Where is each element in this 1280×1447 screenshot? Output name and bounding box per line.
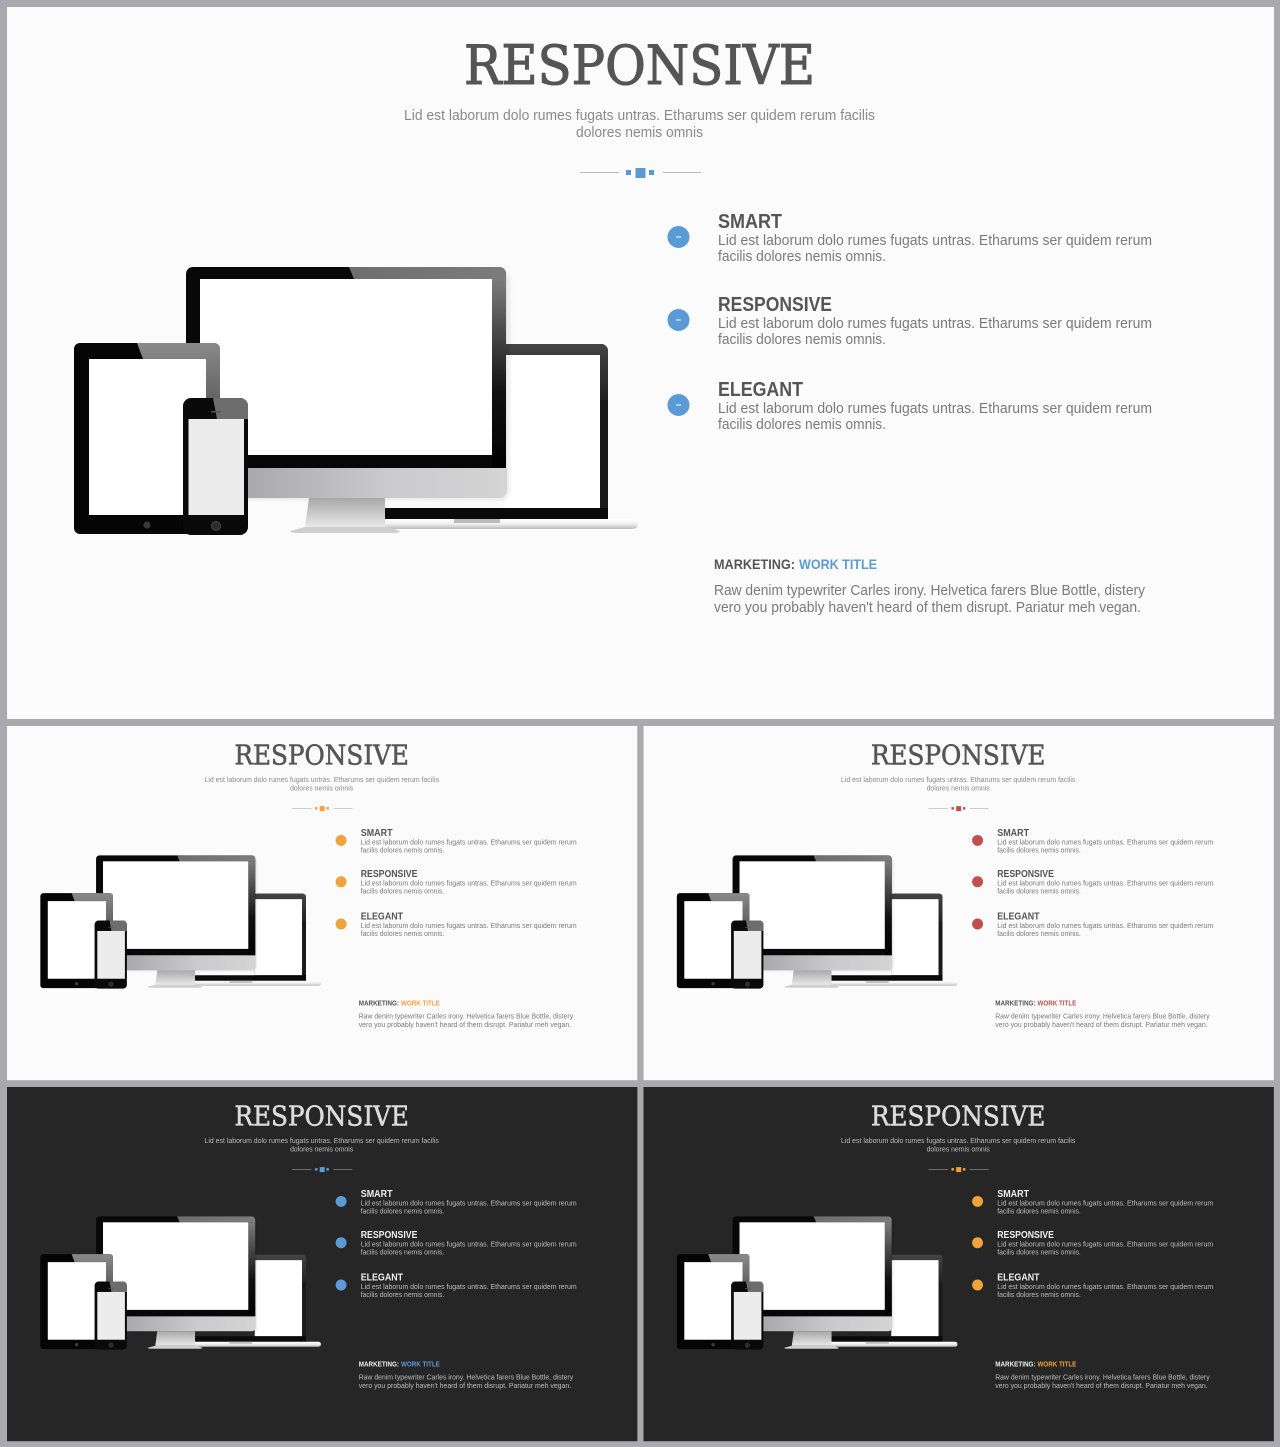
title: RESPONSIVE <box>871 1101 1045 1132</box>
subtitle: Lid est laborum dolo rumes fugats untras. Etharums ser quidem rerum facilis <box>404 108 875 124</box>
title: RESPONSIVE <box>464 34 815 97</box>
feature: elegant: ELEGANT <box>997 912 1040 923</box>
feature: elegant <box>668 379 1152 433</box>
feature: responsive: facilis dolores nemis omnis. <box>718 332 886 348</box>
feature: responsive: facilis dolores nemis omnis. <box>997 1248 1081 1257</box>
marketing block: Raw denim typewriter Carles irony. Helvetica farers Blue Bottle, distery <box>995 1012 1210 1021</box>
subtitle: Lid est laborum dolo rumes fugats untras. Etharums ser quidem rerum facilis <box>205 775 439 784</box>
feature: elegant <box>336 1273 577 1299</box>
subtitle: Lid est laborum dolo rumes fugats untras. Etharums ser quidem rerum facilis <box>841 775 1076 784</box>
feature: responsive <box>972 1230 1213 1257</box>
divider ornament <box>292 806 352 811</box>
marketing block <box>714 556 1146 616</box>
marketing block: WORK TITLE <box>401 1001 440 1008</box>
feature: smart: Lid est laborum dolo rumes fugats untras. Etharums ser quidem rerum <box>997 837 1213 846</box>
feature: responsive: Lid est laborum dolo rumes fugats untras. Etharums ser quidem rerum <box>997 1240 1213 1249</box>
feature: elegant <box>972 912 1213 938</box>
feature: responsive <box>336 869 577 896</box>
feature: elegant: Lid est laborum dolo rumes fugats untras. Etharums ser quidem rerum <box>718 401 1152 417</box>
feature: smart: Lid est laborum dolo rumes fugats untras. Etharums ser quidem rerum <box>361 1198 577 1207</box>
feature: elegant: ELEGANT <box>361 1273 403 1284</box>
feature: smart: SMART <box>361 828 393 839</box>
marketing block: WORK TITLE <box>401 1362 440 1369</box>
subtitle: dolores nemis omnis <box>927 1145 990 1154</box>
feature: responsive: RESPONSIVE <box>997 869 1054 880</box>
feature: smart: facilis dolores nemis omnis. <box>997 1206 1081 1215</box>
marketing block: vero you probably haven't heard of them disrupt. Pariatur meh vegan. <box>995 1381 1208 1390</box>
marketing block: WORK TITLE <box>1038 1362 1077 1369</box>
feature: smart: facilis dolores nemis omnis. <box>997 845 1081 854</box>
feature: responsive: Lid est laborum dolo rumes fugats untras. Etharums ser quidem rerum <box>361 879 577 888</box>
feature: elegant: ELEGANT <box>997 1273 1040 1284</box>
feature: elegant: facilis dolores nemis omnis. <box>361 1290 444 1299</box>
subtitle: dolores nemis omnis <box>290 1145 354 1154</box>
feature: elegant: ELEGANT <box>361 912 403 923</box>
feature: smart <box>668 211 1152 265</box>
marketing block: vero you probably haven't heard of them disrupt. Pariatur meh vegan. <box>714 600 1141 616</box>
marketing block <box>359 1001 574 1029</box>
subtitle: Lid est laborum dolo rumes fugats untras. Etharums ser quidem rerum facilis <box>841 1136 1076 1145</box>
feature: smart: Lid est laborum dolo rumes fugats untras. Etharums ser quidem rerum <box>361 837 577 846</box>
feature: elegant: Lid est laborum dolo rumes fugats untras. Etharums ser quidem rerum <box>361 1282 577 1291</box>
feature: smart: Lid est laborum dolo rumes fugats untras. Etharums ser quidem rerum <box>997 1198 1213 1207</box>
feature: smart <box>972 1189 1213 1215</box>
feature: responsive: Lid est laborum dolo rumes fugats untras. Etharums ser quidem rerum <box>718 316 1152 332</box>
feature: smart: facilis dolores nemis omnis. <box>361 845 444 854</box>
feature: responsive: RESPONSIVE <box>361 1230 418 1241</box>
marketing block <box>359 1362 574 1390</box>
divider ornament <box>292 1167 352 1172</box>
marketing block <box>995 1362 1210 1390</box>
feature: responsive <box>336 1230 577 1257</box>
feature: responsive: facilis dolores nemis omnis. <box>997 887 1081 896</box>
panel: small dark slide, orange <box>644 1087 1274 1441</box>
title: RESPONSIVE <box>871 740 1045 771</box>
marketing block: MARKETING: <box>714 556 795 572</box>
device mockups <box>40 855 321 989</box>
marketing block: MARKETING: <box>995 1001 1036 1008</box>
feature: responsive: RESPONSIVE <box>718 294 832 316</box>
marketing block: vero you probably haven't heard of them disrupt. Pariatur meh vegan. <box>359 1381 571 1390</box>
marketing block: vero you probably haven't heard of them disrupt. Pariatur meh vegan. <box>359 1020 571 1029</box>
feature: smart: SMART <box>361 1189 393 1200</box>
feature: elegant: facilis dolores nemis omnis. <box>718 417 886 433</box>
divider ornament <box>929 806 989 811</box>
feature: elegant: facilis dolores nemis omnis. <box>997 929 1081 938</box>
device mockups <box>74 267 638 535</box>
feature: responsive: Lid est laborum dolo rumes fugats untras. Etharums ser quidem rerum <box>997 879 1213 888</box>
subtitle <box>841 1136 1076 1154</box>
subtitle <box>841 775 1076 793</box>
panel: small light slide, red <box>644 726 1274 1080</box>
title: RESPONSIVE <box>234 740 409 771</box>
feature: elegant: ELEGANT <box>718 379 803 401</box>
feature: responsive: RESPONSIVE <box>361 869 418 880</box>
marketing block: MARKETING: <box>995 1362 1036 1369</box>
subtitle: dolores nemis omnis <box>290 784 354 793</box>
feature: smart: SMART <box>997 1189 1029 1200</box>
feature: elegant: facilis dolores nemis omnis. <box>997 1290 1081 1299</box>
feature: elegant: Lid est laborum dolo rumes fugats untras. Etharums ser quidem rerum <box>997 921 1213 930</box>
feature: smart <box>336 828 577 854</box>
subtitle <box>205 1136 439 1154</box>
feature: elegant <box>336 912 577 938</box>
marketing block: WORK TITLE <box>1038 1001 1077 1008</box>
marketing block: Raw denim typewriter Carles irony. Helvetica farers Blue Bottle, distery <box>359 1373 574 1382</box>
device mockups <box>677 855 957 989</box>
device mockups <box>40 1216 321 1350</box>
marketing block <box>995 1001 1210 1029</box>
marketing block: Raw denim typewriter Carles irony. Helvetica farers Blue Bottle, distery <box>995 1373 1210 1382</box>
title: RESPONSIVE <box>234 1101 409 1132</box>
subtitle <box>404 108 875 141</box>
feature: smart: facilis dolores nemis omnis. <box>718 249 886 265</box>
marketing block: WORK TITLE <box>799 556 877 572</box>
subtitle <box>205 775 439 793</box>
feature: smart: Lid est laborum dolo rumes fugats untras. Etharums ser quidem rerum <box>718 233 1152 249</box>
marketing block: vero you probably haven't heard of them disrupt. Pariatur meh vegan. <box>995 1020 1208 1029</box>
feature: responsive: Lid est laborum dolo rumes fugats untras. Etharums ser quidem rerum <box>361 1240 577 1249</box>
feature: elegant: facilis dolores nemis omnis. <box>361 929 444 938</box>
panel: small dark slide, blue <box>7 1087 637 1441</box>
feature: responsive <box>668 294 1152 348</box>
feature: responsive: facilis dolores nemis omnis. <box>361 887 444 896</box>
feature: smart: SMART <box>718 211 782 233</box>
feature: elegant: Lid est laborum dolo rumes fugats untras. Etharums ser quidem rerum <box>997 1282 1213 1291</box>
feature: smart: facilis dolores nemis omnis. <box>361 1206 444 1215</box>
subtitle: dolores nemis omnis <box>576 125 703 141</box>
device mockups <box>677 1216 957 1350</box>
feature: smart: SMART <box>997 828 1029 839</box>
feature: smart <box>336 1189 577 1215</box>
feature: responsive <box>972 869 1213 896</box>
feature: smart <box>972 828 1213 854</box>
marketing block: MARKETING: <box>359 1362 399 1369</box>
marketing block: MARKETING: <box>359 1001 399 1008</box>
subtitle: dolores nemis omnis <box>927 784 990 793</box>
divider ornament <box>929 1167 989 1172</box>
divider ornament <box>580 168 701 178</box>
panel: large light slide <box>7 7 1274 719</box>
feature: elegant <box>972 1273 1213 1299</box>
feature: responsive: RESPONSIVE <box>997 1230 1054 1241</box>
marketing block: Raw denim typewriter Carles irony. Helvetica farers Blue Bottle, distery <box>714 583 1146 599</box>
marketing block: Raw denim typewriter Carles irony. Helvetica farers Blue Bottle, distery <box>359 1012 574 1021</box>
feature: elegant: Lid est laborum dolo rumes fugats untras. Etharums ser quidem rerum <box>361 921 577 930</box>
panel: small light slide, orange <box>7 726 637 1080</box>
feature: responsive: facilis dolores nemis omnis. <box>361 1248 444 1257</box>
subtitle: Lid est laborum dolo rumes fugats untras. Etharums ser quidem rerum facilis <box>205 1136 439 1145</box>
